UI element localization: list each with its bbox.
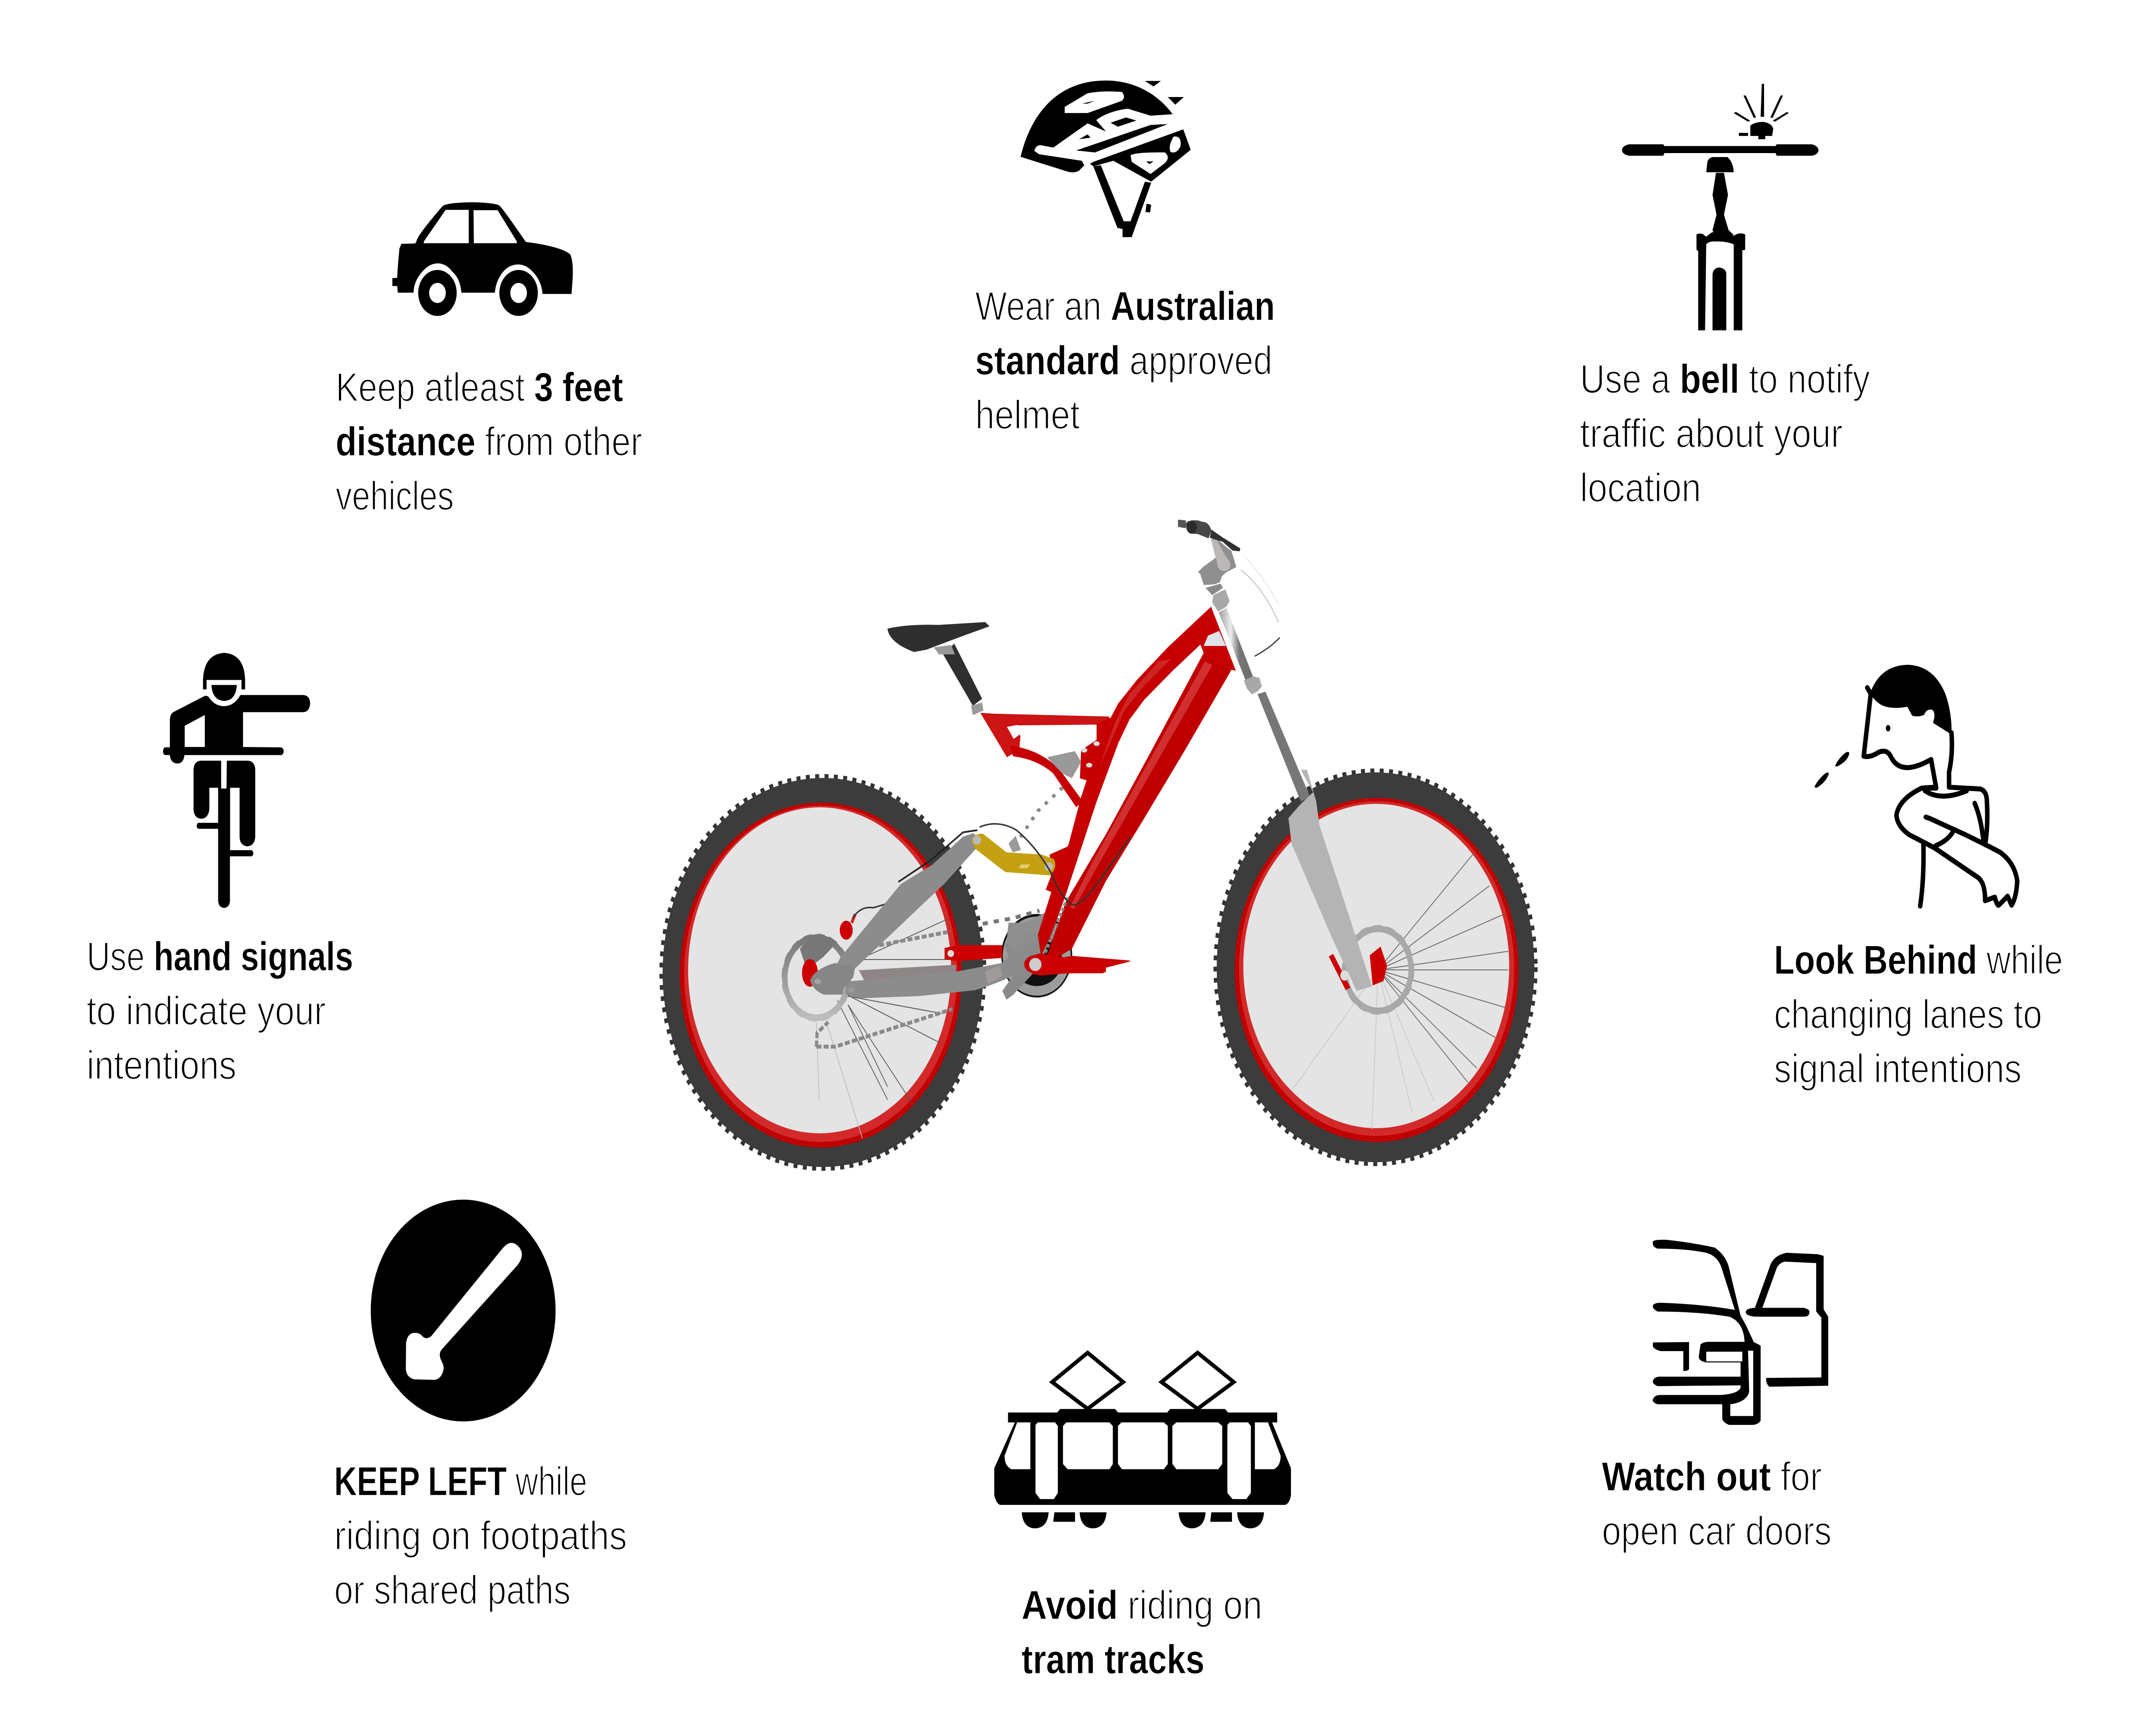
rear chain [816,932,952,1047]
icon: cyclist giving hand signal [163,653,310,908]
text: keep distance: distance from other [335,419,642,464]
rear rotor [783,901,895,1020]
handlebar, stem and headset [1178,520,1280,694]
text: keep distance: Keep atleast 3 feet [335,365,623,410]
gold rocker link [971,824,1130,905]
icon: helmet [1021,81,1191,237]
text: helmet: Wear an Australian [975,284,1275,329]
text: bell: location [1580,465,1701,511]
text: look behind: changing lanes to [1774,992,2042,1037]
icon: keep left arrow sign [371,1200,555,1421]
text: keep distance [335,365,642,519]
icon: tram [994,1353,1291,1528]
text: car doors: Watch out for [1602,1454,1822,1499]
text: tram tracks: Avoid riding on [1022,1583,1263,1628]
icon: handlebar with bell [1622,84,1818,330]
text: helmet: helmet [975,392,1080,438]
text: keep left: KEEP LEFT while [334,1459,587,1504]
text: tram tracks [1022,1583,1263,1682]
text: hand signals [87,934,353,1088]
icon: car [392,202,573,316]
text: keep left: riding on footpaths [334,1513,627,1559]
text: look behind: signal intentions [1774,1046,2021,1091]
text: hand signals: to indicate your [87,988,326,1034]
crank arm [1028,953,1131,975]
text: hand signals: intentions [87,1043,236,1088]
text: bell: Use a bell to notify [1580,357,1870,402]
text: bell [1580,357,1870,511]
front fork [1257,692,1372,991]
front brake caliper [1329,947,1387,990]
text: bell: traffic about your [1580,411,1843,456]
text: car doors: open car doors [1602,1509,1832,1554]
front rotor [1343,926,1413,1013]
text: hand signals: Use hand signals [87,934,353,979]
text: look behind: Look Behind while [1774,938,2063,983]
frame: main tubes [980,607,1236,975]
front wheel [1216,771,1536,1164]
panel: bicycle illustration [661,520,1536,1168]
rear wheel [661,777,984,1168]
text: keep left: or shared paths [334,1568,570,1613]
icon: person looking behind [1814,665,2017,906]
text: tram tracks: tram tracks [1022,1637,1204,1682]
text: car doors [1602,1454,1832,1554]
rear swingarm [810,830,1037,998]
chainring and drivetrain [945,911,1072,1000]
text: helmet [975,284,1275,438]
text: look behind [1774,938,2063,1091]
text: helmet: standard approved [975,338,1272,383]
icon: open car door [1653,1240,1828,1425]
saddle and seat post [887,622,990,715]
text: keep left [334,1459,627,1613]
text: keep distance: vehicles [335,474,454,519]
